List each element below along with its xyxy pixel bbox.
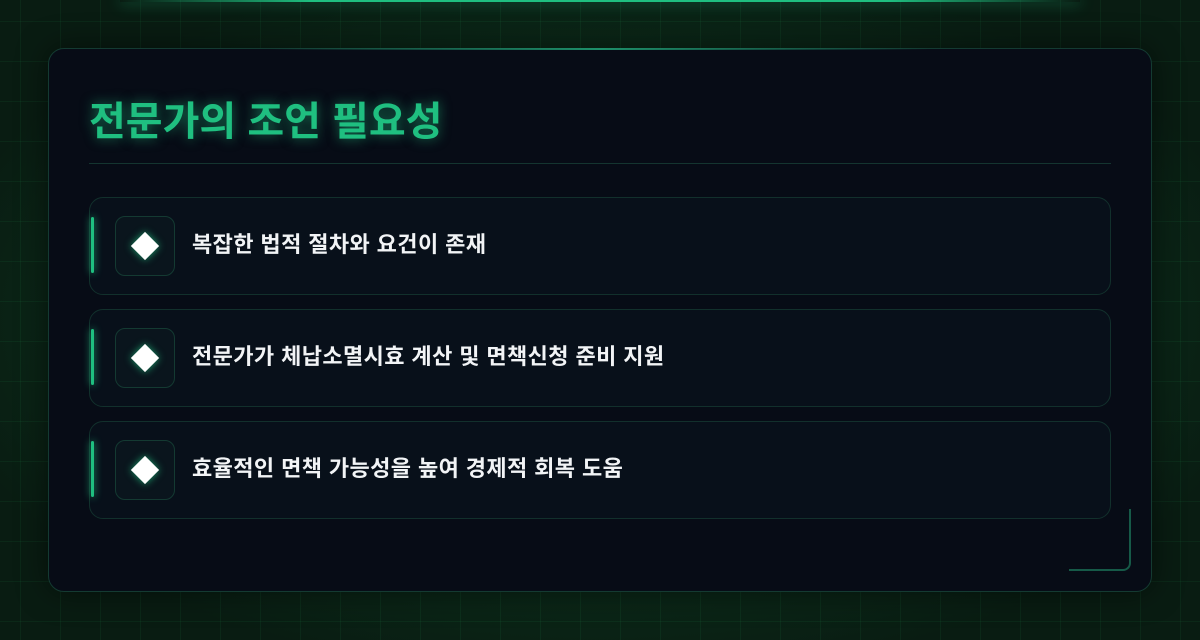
title: 전문가의 조언 필요성 bbox=[89, 100, 442, 144]
icon: diamond bbox=[115, 216, 175, 276]
item 3 bbox=[89, 421, 1111, 519]
text 3: 효율적인 면책 가능성을 높여 경제적 회복 도움 bbox=[192, 456, 623, 481]
item 2 bbox=[89, 309, 1111, 407]
icon: diamond bbox=[115, 440, 175, 500]
text 1: 복잡한 법적 절차와 요건이 존재 bbox=[192, 232, 486, 257]
item 1 bbox=[89, 197, 1111, 295]
icon: diamond bbox=[115, 328, 175, 388]
text 2: 전문가가 체납소멸시효 계산 및 면책신청 준비 지원 bbox=[192, 344, 665, 369]
panel: main card bbox=[48, 48, 1152, 592]
corner bracket bbox=[1069, 509, 1131, 571]
